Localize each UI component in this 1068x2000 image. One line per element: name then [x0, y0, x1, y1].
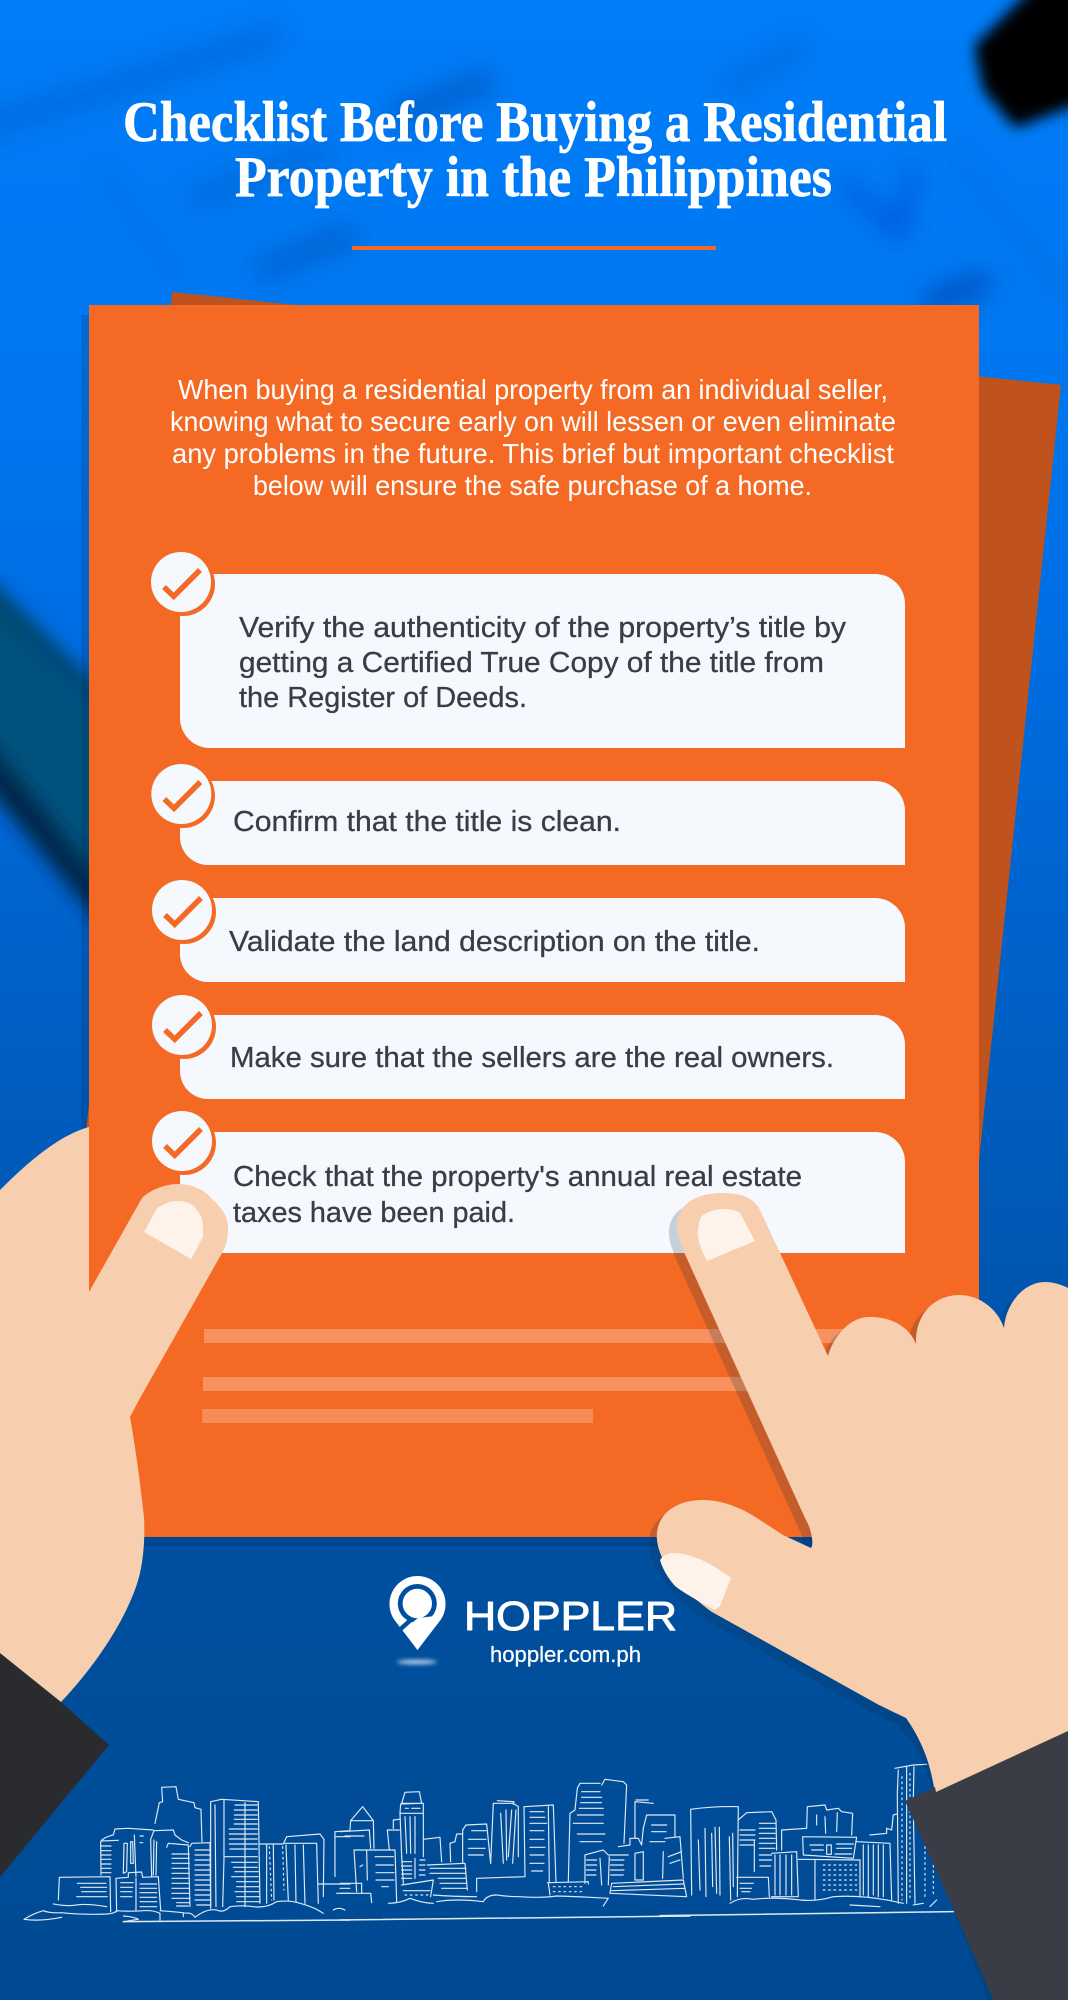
right hand skin	[657, 1193, 1068, 1800]
brand name: HOPPLER	[464, 1593, 677, 1639]
right hand	[649, 1193, 1068, 2000]
intro text: When buying a residential property from an individual seller,	[178, 374, 888, 405]
hand shadow	[649, 1200, 1068, 2000]
icon: check	[151, 764, 215, 828]
checklist item 4: Make sure that the sellers are the real owners.	[230, 1042, 834, 1074]
logo	[389, 1576, 677, 1667]
checklist item 5: taxes have been paid.	[233, 1197, 515, 1229]
right sleeve	[905, 1731, 1068, 2000]
intro text: below will ensure the safe purchase of a home.	[253, 470, 812, 501]
front sheet	[89, 305, 979, 1537]
left hand	[0, 1127, 228, 1877]
icon: map pin	[389, 1576, 446, 1650]
checklist item 2	[151, 764, 905, 865]
checklist item 1: getting a Certified True Copy of the title from	[239, 647, 824, 679]
checklist item 1: the Register of Deeds.	[239, 682, 527, 714]
icon: check	[152, 1111, 216, 1175]
intro text	[170, 374, 896, 501]
icon: check	[151, 552, 215, 616]
icon: check	[152, 880, 216, 944]
placeholder text lines	[202, 1329, 854, 1423]
checklist item 3: Validate the land description on the title.	[229, 926, 760, 958]
icon: check	[152, 995, 216, 1059]
index fingernail	[698, 1209, 755, 1261]
left hand skin	[0, 1127, 228, 1702]
intro text: knowing what to secure early on will lessen or even eliminate	[170, 406, 896, 437]
title: Property in the Philippines	[235, 146, 832, 209]
checklist item 4	[152, 995, 905, 1099]
checklist item 1	[151, 552, 905, 748]
checklist item 2: Confirm that the title is clean.	[233, 806, 621, 838]
thumbnail	[660, 1553, 731, 1610]
pin glow	[397, 1660, 437, 1664]
checklist item 3	[152, 880, 905, 982]
title: Checklist Before Buying a Residential	[123, 91, 947, 154]
back sheet	[74, 292, 1061, 1340]
checklist item 5: Check that the property's annual real estate	[233, 1161, 802, 1193]
checklist item 5	[152, 1111, 905, 1253]
sheet shadow	[81, 315, 961, 1547]
website: hoppler.com.ph	[490, 1642, 641, 1667]
panel: document	[74, 292, 1061, 1547]
city skyline	[24, 1764, 953, 1922]
checklist item 1: Verify the authenticity of the property’s title by	[239, 612, 847, 644]
intro text: any problems in the future. This brief but important checklist	[172, 438, 894, 469]
title	[123, 91, 947, 209]
left thumbnail	[144, 1201, 203, 1259]
left sleeve	[0, 1653, 109, 1877]
